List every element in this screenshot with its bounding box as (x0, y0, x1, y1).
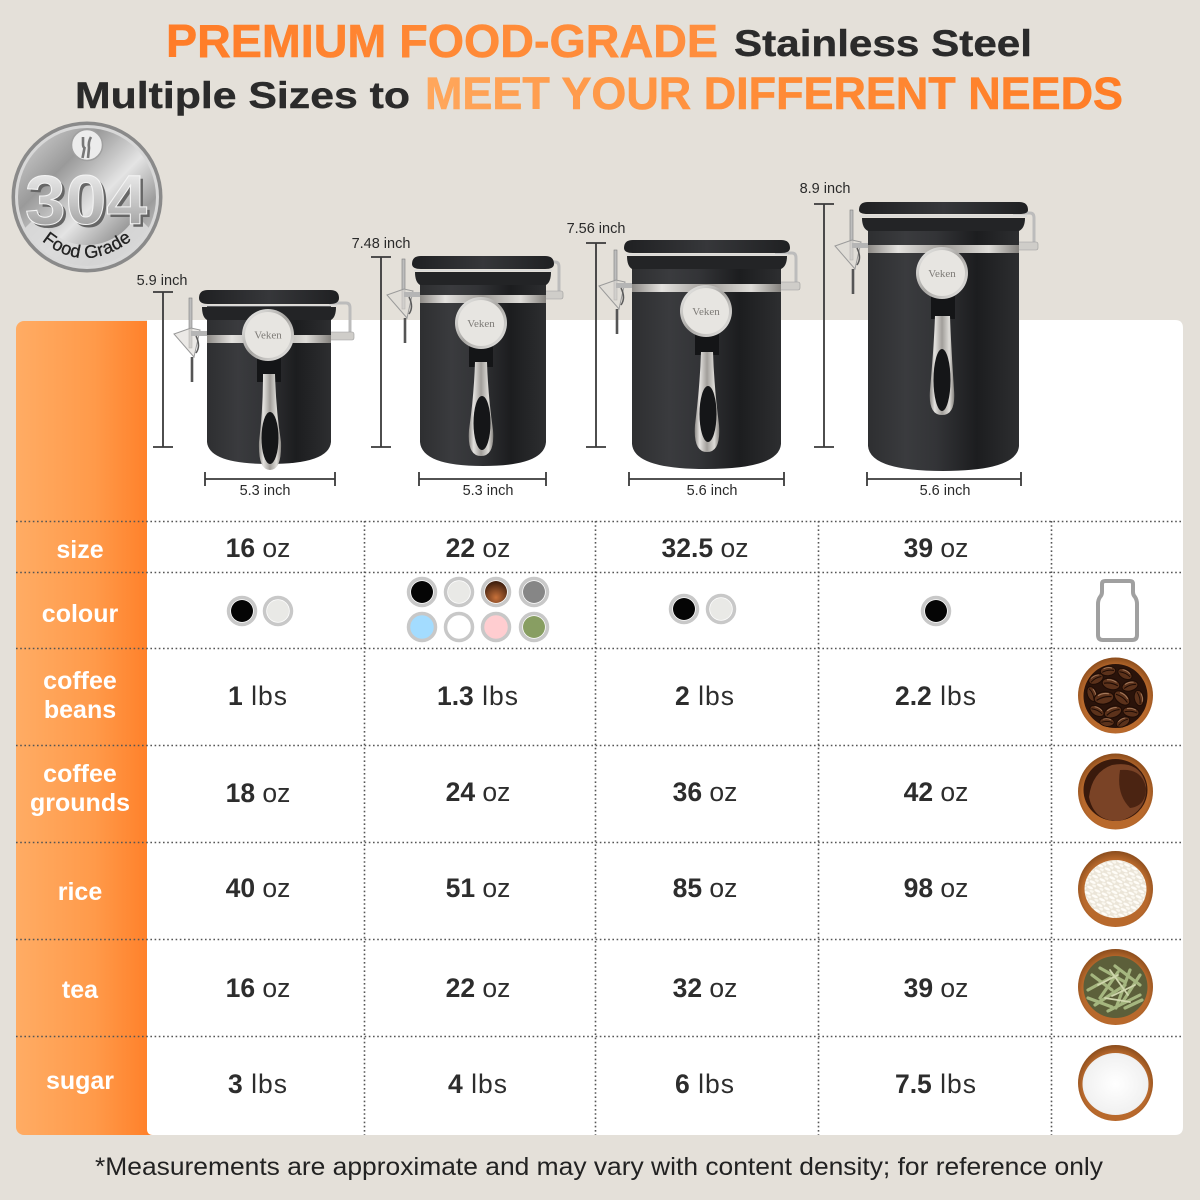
panel: white table (147, 320, 1183, 1135)
row: coffee beans: 1 lbs (228, 681, 288, 711)
dimensions: 22 oz jar: 5.3 inch (463, 483, 513, 499)
panel: orange label column (16, 321, 158, 1135)
title line one (166, 15, 1032, 67)
row: sugar: 6 lbs (675, 1069, 735, 1099)
icon: bowl of coffee beans (1078, 658, 1153, 734)
title line one: Stainless Steel (734, 23, 1032, 64)
title line two: Multiple Sizes to (75, 75, 410, 116)
row: coffee grounds: 24 oz (446, 777, 510, 807)
title line two (75, 68, 1123, 119)
icon: bowl of coffee grounds (1078, 754, 1153, 830)
row labels: sugar (46, 1067, 114, 1095)
row labels: grounds (30, 789, 130, 817)
row: size (226, 533, 968, 563)
title (75, 15, 1123, 119)
row: tea: 32 oz (673, 973, 737, 1003)
row: coffee beans: 1.3 lbs (437, 681, 519, 711)
row labels: coffee (43, 760, 117, 788)
badge: 304 food grade: Food Grade (42, 232, 130, 258)
dimensions: 32.5 oz jar (567, 221, 784, 499)
row: coffee beans: 2 lbs (675, 681, 735, 711)
jar 3: 32.5 oz: Veken (692, 306, 720, 318)
row labels: beans (44, 696, 116, 724)
jar 3: 32.5 oz (599, 240, 800, 469)
row: coffee grounds (226, 777, 968, 808)
dimensions: 22 oz jar: 7.48 inch (352, 236, 410, 252)
row: coffee grounds: 36 oz (673, 777, 737, 807)
row: size: 22 oz (446, 533, 510, 563)
row: size: 16 oz (226, 533, 290, 563)
row labels (30, 536, 130, 1095)
title line one: PREMIUM FOOD-GRADE (166, 15, 718, 67)
jar 2: 22 oz: Veken (467, 318, 495, 330)
title line two: MEET YOUR DIFFERENT NEEDS (425, 68, 1123, 119)
icon: empty jar outline (1098, 581, 1137, 640)
row labels: size (56, 536, 104, 564)
row: rice (226, 873, 968, 903)
jar 1: 16 oz (174, 290, 354, 470)
row: sugar: 3 lbs (228, 1069, 288, 1099)
row: tea: 39 oz (904, 973, 968, 1003)
icon: bowl of sugar (1078, 1045, 1153, 1121)
row: coffee grounds: 18 oz (226, 778, 290, 808)
badge: 304 food grade: 304 (28, 164, 150, 242)
dimensions: 22 oz jar (352, 236, 546, 499)
row: tea: 16 oz (226, 973, 290, 1003)
dimensions: 16 oz jar: 5.3 inch (240, 483, 290, 499)
icon: fork and knife (72, 130, 102, 160)
row: coffee beans (228, 681, 977, 711)
row: rice: 40 oz (226, 873, 290, 903)
row: colour swatches (228, 578, 950, 640)
jar 4: 39 oz: Veken (928, 268, 956, 280)
row: coffee grounds: 42 oz (904, 777, 968, 807)
row labels: colour (42, 600, 118, 628)
icon: bowl of tea leaves (1078, 949, 1153, 1025)
dimensions: 16 oz jar: 5.9 inch (137, 273, 187, 289)
row: rice: 51 oz (446, 873, 510, 903)
row: rice: 98 oz (904, 873, 968, 903)
dimensions: 32.5 oz jar: 7.56 inch (567, 221, 625, 237)
row labels: coffee (43, 667, 117, 695)
jar 4: 39 oz (835, 202, 1038, 471)
dimensions: 16 oz jar (137, 273, 335, 499)
dimensions: 39 oz jar: 8.9 inch (800, 181, 850, 197)
row labels: tea (62, 976, 99, 1004)
dimensions: 39 oz jar: 5.6 inch (920, 483, 970, 499)
badge: 304 food grade: 304 (25, 161, 147, 239)
row labels: rice (58, 878, 102, 906)
row: sugar (228, 1069, 977, 1099)
row: sugar: 7.5 lbs (895, 1069, 977, 1099)
dimensions: 32.5 oz jar: 5.6 inch (687, 483, 737, 499)
jar 1: 16 oz: Veken (254, 330, 282, 342)
footnote: *Measurements are approximate and may vary with content density; for reference only (95, 1153, 1104, 1181)
row: tea: 22 oz (446, 973, 510, 1003)
icon: bowl of rice (1078, 851, 1153, 927)
row: rice: 85 oz (673, 873, 737, 903)
row: size: 39 oz (904, 533, 968, 563)
dimensions: 39 oz jar (800, 181, 1021, 499)
row: tea (226, 973, 968, 1003)
table grid (16, 521, 1183, 1135)
jar 2: 22 oz (387, 256, 563, 466)
row: sugar: 4 lbs (448, 1069, 508, 1099)
badge: 304 food grade (12, 122, 162, 272)
row: coffee beans: 2.2 lbs (895, 681, 977, 711)
row: size: 32.5 oz (662, 533, 748, 563)
